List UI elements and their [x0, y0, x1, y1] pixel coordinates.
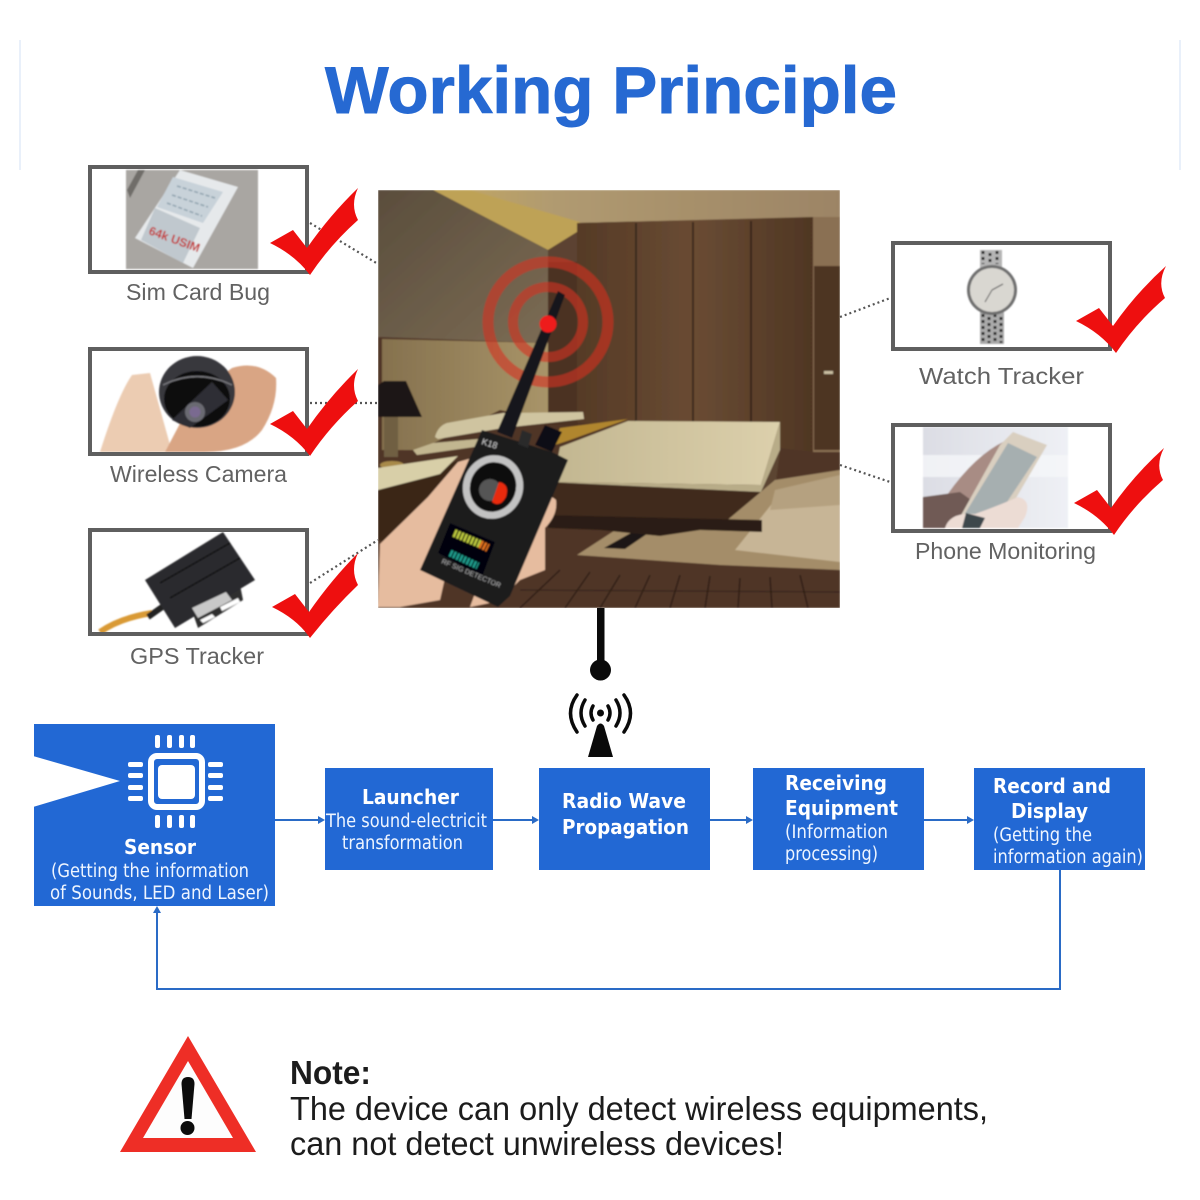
panel: launcher: [325, 768, 493, 870]
icon: warning triangle: [120, 1036, 256, 1152]
caption: Wireless Camera: [110, 461, 287, 487]
icon: radio tower: [570, 695, 630, 757]
detector device: [420, 425, 568, 607]
panel: record and display: [974, 768, 1145, 870]
rug: [548, 470, 840, 570]
panel: record and display: information again): [993, 847, 1143, 868]
note text: The device can only detect wireless equipments,: [290, 1090, 988, 1127]
panel: receiving equipment: [753, 768, 924, 870]
mattress: [553, 421, 780, 485]
panel: gps tracker: [90, 530, 358, 669]
detector device: RF SIG DETECTOR: [440, 558, 502, 590]
note text: Note:: [290, 1054, 371, 1091]
panel: launcher: The sound-electricit: [325, 811, 487, 832]
panel: receiving equipment: processing): [785, 844, 878, 865]
check mark: [272, 553, 358, 638]
check mark: [270, 188, 358, 275]
sim card photo: 64k USIM: [147, 224, 202, 255]
panel: radio wave propagation: Propagation: [562, 815, 689, 839]
panel: watch tracker: [893, 243, 1166, 389]
panel: launcher: Launcher: [362, 785, 459, 809]
caption: GPS Tracker: [130, 643, 264, 669]
caption: Watch Tracker: [919, 363, 1084, 389]
signal stem with dot: [590, 608, 611, 680]
antenna: [497, 291, 565, 438]
note text: [290, 1054, 988, 1162]
note text: can not detect unwireless devices!: [290, 1125, 784, 1162]
panel: sensor: [33, 724, 275, 906]
red signal dot: [540, 316, 556, 332]
panel: sim card bug: [90, 167, 358, 305]
title: Working Principle: [325, 53, 897, 127]
panel: receiving equipment: (Information: [785, 822, 888, 843]
icon: chip: [128, 735, 223, 828]
sensor text: of Sounds, LED and Laser): [50, 883, 269, 904]
gps device: [100, 532, 255, 632]
panel: radio wave propagation: Radio Wave: [562, 789, 686, 813]
panel: wireless camera: [90, 349, 358, 487]
check mark: [1076, 266, 1166, 353]
panel: receiving equipment: Receiving: [785, 771, 887, 795]
signal display: [438, 523, 495, 577]
panel: launcher: transformation: [342, 833, 463, 854]
panel: bedroom photo with detector: [378, 190, 840, 608]
sim card photo: [126, 170, 258, 269]
check mark: [1074, 448, 1164, 535]
bedside lamp: [378, 381, 422, 469]
panel: radio wave propagation: [539, 768, 710, 870]
caption: Sim Card Bug: [126, 279, 270, 305]
detector device: K18: [480, 436, 499, 451]
camera in fingers: [100, 356, 276, 452]
sensor text: [50, 835, 269, 904]
panel: phone monitoring: [893, 425, 1164, 564]
floor planks: [520, 570, 840, 608]
pillows: [413, 412, 628, 455]
sensor text: Sensor: [124, 835, 196, 859]
flow connectors: [153, 816, 1060, 989]
panel: record and display: (Getting the: [993, 825, 1092, 846]
bed base: [548, 482, 762, 520]
sensor text: (Getting the information: [51, 861, 249, 882]
watch: [967, 250, 1017, 344]
panel: record and display: Record and: [993, 774, 1111, 798]
bedroom scene: [378, 190, 840, 608]
check mark: [270, 369, 358, 456]
dotted connectors: [310, 223, 893, 583]
signal rings: [488, 262, 608, 382]
panel: receiving equipment: Equipment: [785, 796, 898, 820]
hand: [378, 458, 556, 607]
phone in hand: [923, 427, 1068, 528]
panel: record and display: Display: [1011, 799, 1088, 823]
caption: Phone Monitoring: [915, 538, 1096, 564]
